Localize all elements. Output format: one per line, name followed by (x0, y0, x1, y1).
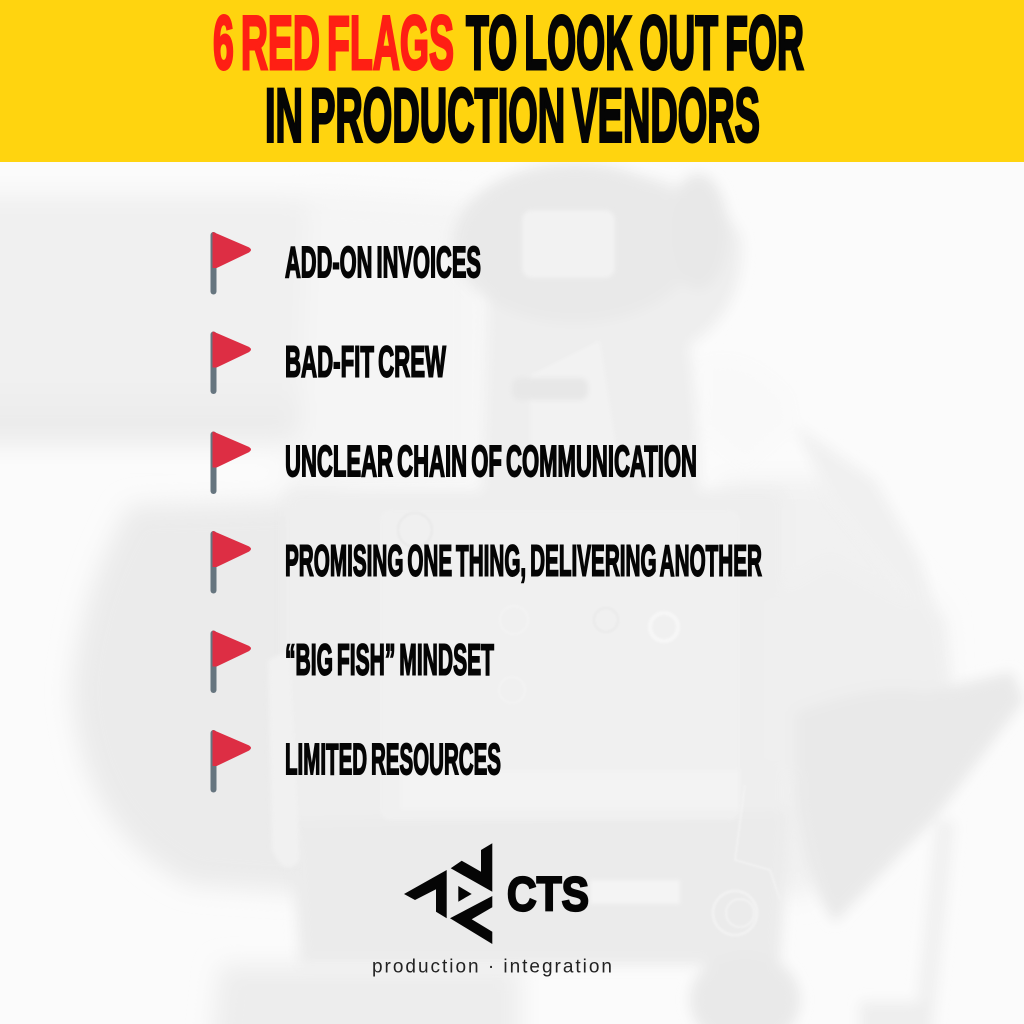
icon: red flag (210, 332, 250, 394)
icon: red flag (210, 232, 250, 294)
header band: 6 RED FLAGS (213, 1, 454, 86)
text: LIMITED RESOURCES (285, 736, 501, 784)
icon: red flag (210, 730, 250, 792)
tagline: production · integration (372, 956, 612, 978)
logo wordmark: CTS (507, 868, 589, 922)
icon: triangular logo mark (404, 843, 492, 944)
icon: red flag (210, 531, 250, 594)
item text: ADD-ON INVOICES (285, 239, 481, 287)
list item 5 (210, 630, 494, 693)
item text: BAD-FIT CREW (285, 338, 446, 386)
icon: red flag (210, 630, 250, 693)
text: “BIG FISH” MINDSET (285, 636, 494, 684)
CTS logo (372, 843, 612, 978)
list item 2 (210, 332, 446, 394)
list item 6 (210, 730, 501, 792)
list item 4 (210, 531, 762, 594)
list item 3 (210, 432, 697, 494)
list item 1 (210, 232, 481, 294)
icon: red flag (210, 432, 250, 494)
header band (0, 0, 1024, 162)
